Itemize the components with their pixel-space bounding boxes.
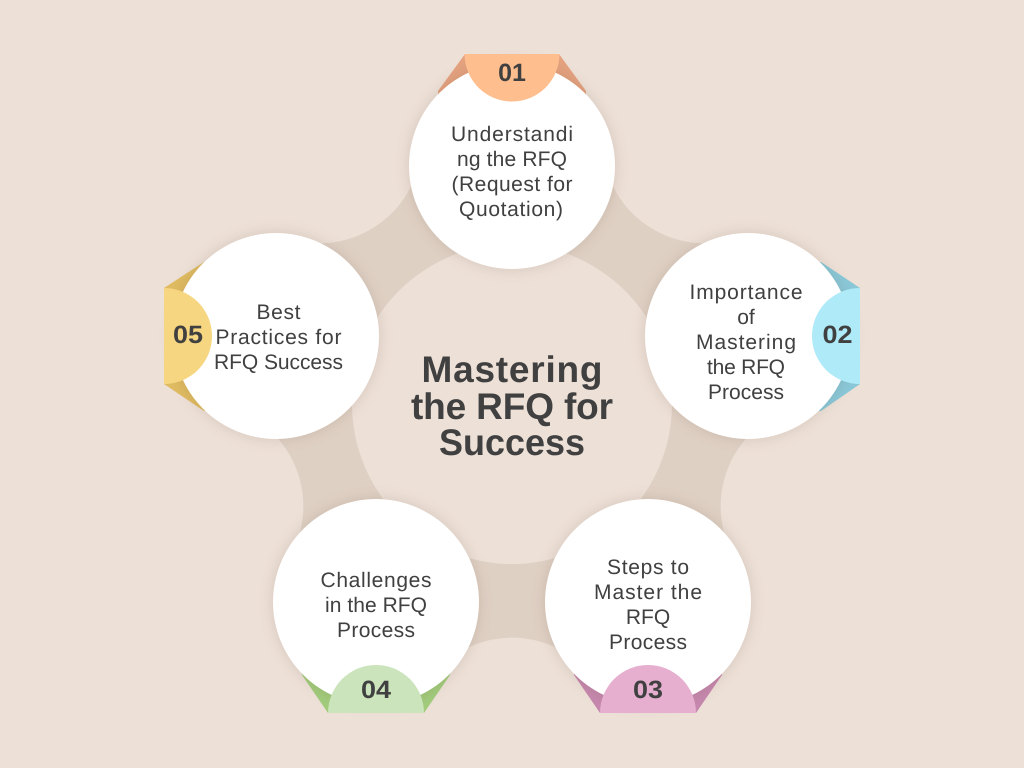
step 01 label <box>451 123 573 221</box>
step 04 number: 04 <box>361 676 391 704</box>
step 01 badge <box>464 54 560 102</box>
step 03 number: 03 <box>633 676 663 704</box>
step 05 <box>164 233 379 439</box>
step 03 label: RFQ <box>626 606 670 629</box>
step 05 label <box>214 301 343 374</box>
step 02 badge <box>812 288 860 384</box>
step 04 <box>273 499 479 713</box>
step 05 tab wings <box>164 262 234 411</box>
step 01 label: ng the RFQ <box>457 148 567 171</box>
step 04 label: Process <box>337 619 415 642</box>
step 02 label: Mastering <box>696 331 796 354</box>
step 04 badge <box>328 665 424 713</box>
step 05 label: RFQ Success <box>214 351 343 374</box>
step 01 label: Understandi <box>451 123 573 146</box>
step 02 number: 02 <box>822 321 852 349</box>
step 03 circle <box>545 499 751 705</box>
step 01 tab wings <box>438 54 586 110</box>
step 03 label <box>594 556 702 654</box>
step 05 number: 05 <box>173 321 203 349</box>
connecting ring band <box>242 154 782 667</box>
step 05 badge <box>164 288 212 384</box>
step 03 label: Steps to <box>607 556 689 579</box>
step 04 label: in the RFQ <box>325 594 427 617</box>
step 03 tab wings <box>574 650 722 713</box>
step 01 label: Quotation) <box>459 198 563 221</box>
step 02 circle <box>645 233 851 439</box>
step 05 label: Practices for <box>216 326 342 349</box>
step 02 label: Process <box>708 381 784 404</box>
step 04 label: Challenges <box>320 569 432 592</box>
step 01 number: 01 <box>498 59 526 87</box>
step 02 label: of <box>737 306 755 329</box>
title: Mastering <box>422 349 602 390</box>
step 05 circle <box>173 233 379 439</box>
step 03 badge <box>600 665 696 713</box>
step 04 tab wings <box>302 650 450 713</box>
step 03 label: Process <box>609 631 687 654</box>
step 04 label <box>320 569 432 642</box>
step 01 label: (Request for <box>452 173 572 196</box>
step 02 <box>645 233 860 439</box>
step 01 <box>409 54 615 269</box>
step 02 tab wings <box>790 262 860 411</box>
step 05 label: Best <box>256 301 301 324</box>
step 04 circle <box>273 499 479 705</box>
title: the RFQ for <box>411 386 613 427</box>
step 01 circle <box>409 63 615 269</box>
step 02 label: Importance <box>690 281 802 304</box>
step 03 label: Master the <box>594 581 702 604</box>
step 02 label: the RFQ <box>707 356 785 379</box>
title <box>411 349 613 463</box>
central circle <box>352 244 672 564</box>
step 03 <box>545 499 751 713</box>
title: Success <box>439 422 585 463</box>
step 02 label <box>690 281 802 404</box>
